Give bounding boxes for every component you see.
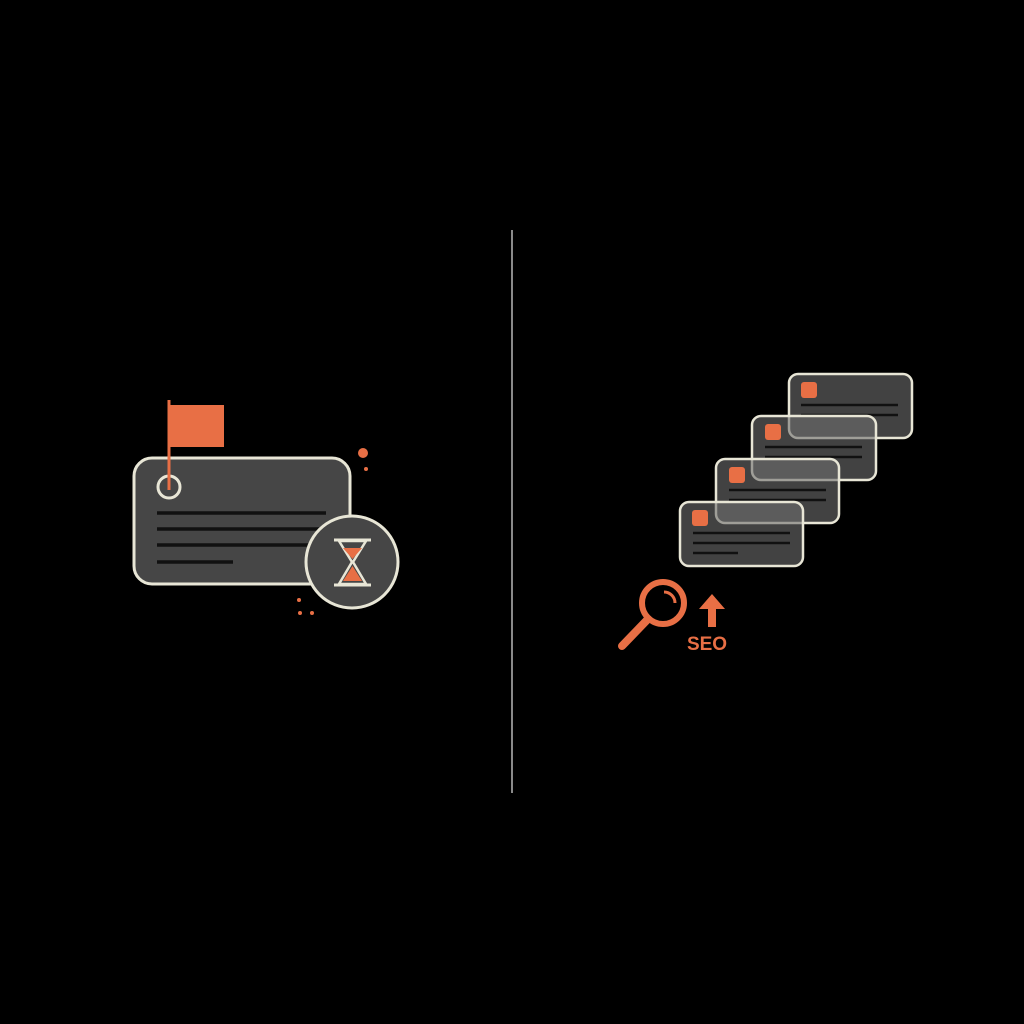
card 4 (bottom) <box>680 502 803 566</box>
icon: hourglass badge <box>306 516 398 608</box>
panel: left flagged card <box>134 400 398 615</box>
panel: right stacked cards <box>680 374 912 566</box>
card 3 <box>716 459 839 523</box>
decorative dots <box>297 448 368 615</box>
icon: up arrow <box>699 594 725 627</box>
card 1 (top) <box>789 374 912 438</box>
divider line <box>511 230 513 793</box>
icon: magnifier <box>622 582 684 646</box>
card 2 <box>752 416 876 480</box>
card <box>134 458 350 584</box>
icon: flag <box>169 400 224 490</box>
SEO label: SEO <box>687 634 727 655</box>
